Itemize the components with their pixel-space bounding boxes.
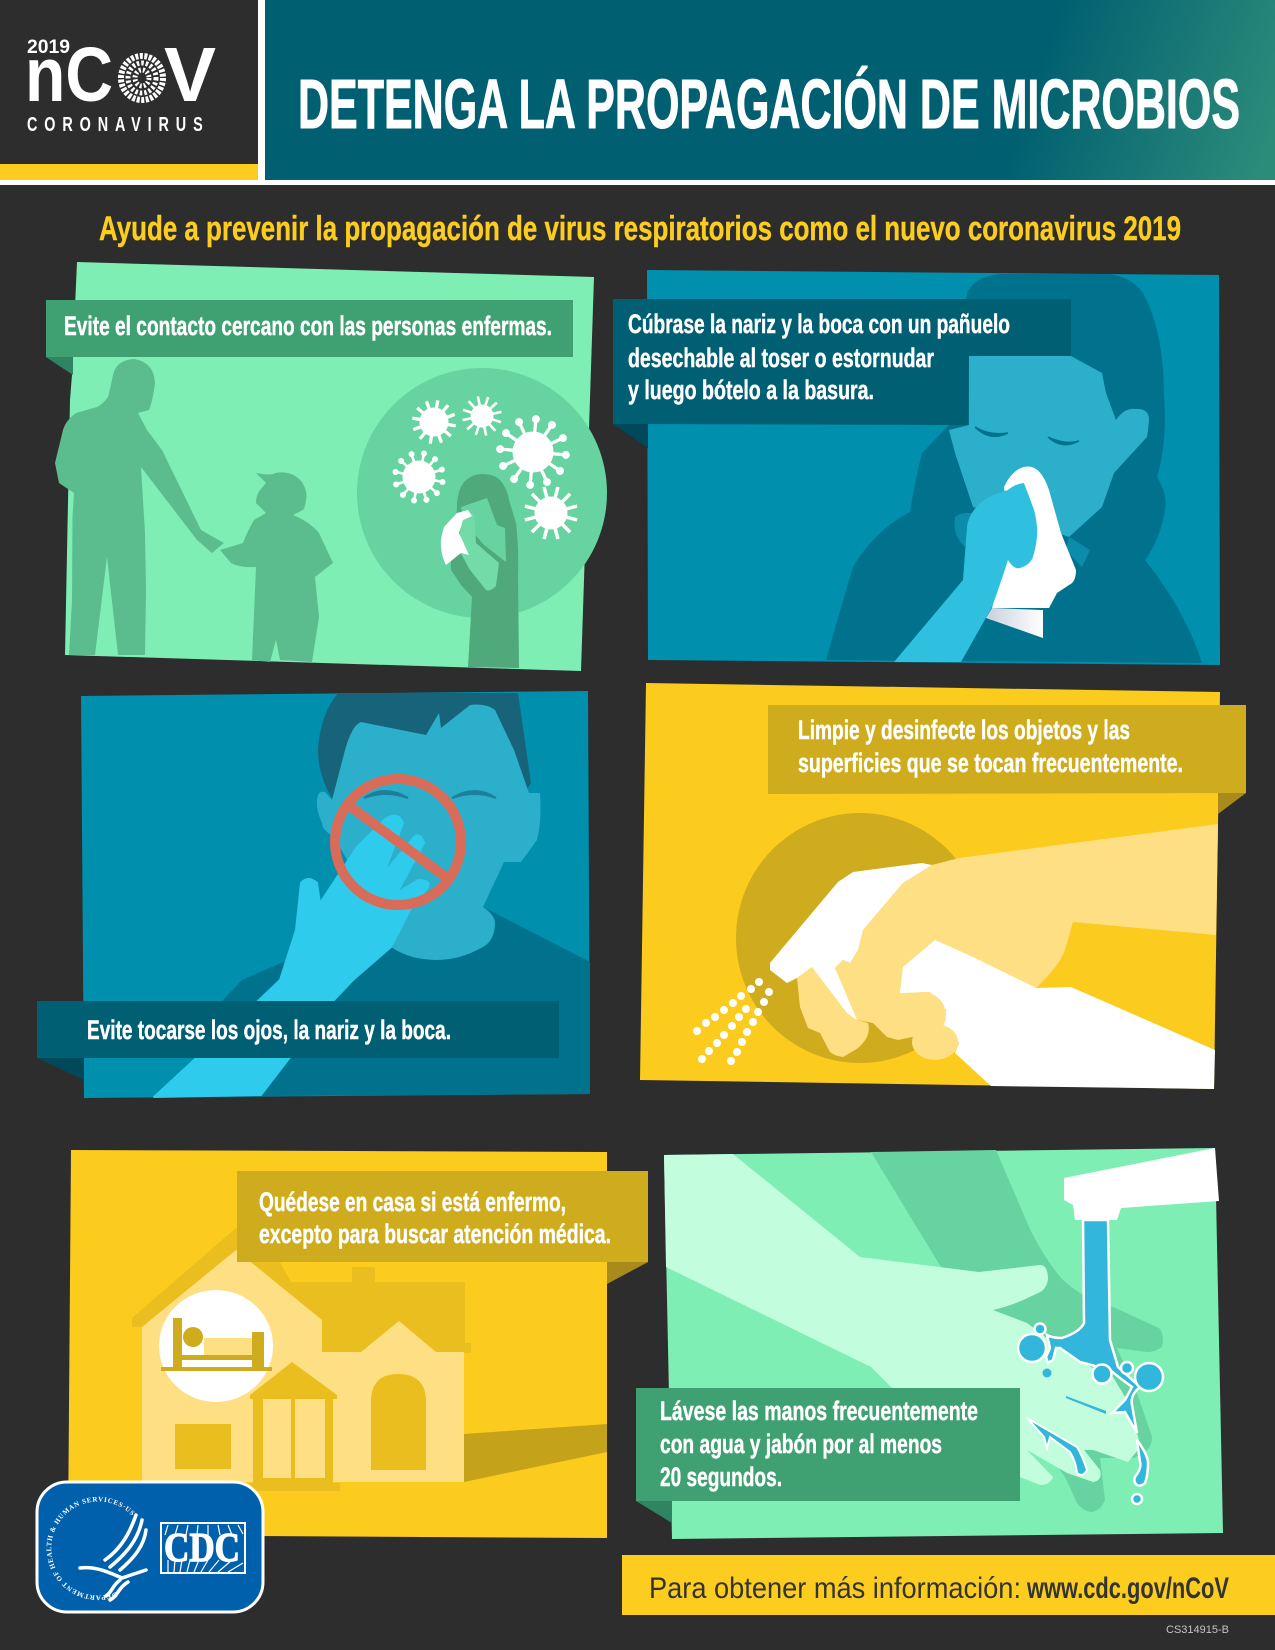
spray head bbox=[770, 863, 932, 1020]
prohibition sign bbox=[335, 779, 461, 905]
illustration: boy touching face bbox=[154, 693, 590, 1097]
banner: clean and disinfect bbox=[768, 705, 1246, 814]
banner: avoid close contact: Evite el contacto cercano con las personas enfermas. bbox=[64, 311, 552, 341]
front hand bbox=[664, 1154, 1139, 1485]
banner: cover nose and mouth: y luego bótelo a la basura. bbox=[628, 375, 874, 405]
publication code: CS314915-B bbox=[1166, 1624, 1229, 1636]
logo: HHS and CDC bbox=[36, 1480, 264, 1614]
panel: wash hands bbox=[636, 1148, 1223, 1539]
panel: cover nose and mouth bbox=[613, 270, 1220, 665]
bed in white circle bbox=[159, 1290, 273, 1402]
bottle body bbox=[900, 940, 1215, 1089]
illustration: house with bed bbox=[132, 1228, 607, 1491]
logo block: 2019 nCoV coronavirus bbox=[0, 0, 258, 180]
footer: more information: Para obtener más información: bbox=[649, 1572, 1021, 1605]
panel: stay home bbox=[68, 1150, 648, 1538]
water and bubbles bbox=[1018, 1220, 1163, 1504]
back hand bbox=[871, 1150, 1163, 1512]
banner: clean and disinfect: Limpie y desinfecte los objetos y las bbox=[798, 715, 1130, 745]
banner: stay home: excepto para buscar atención médica. bbox=[259, 1219, 611, 1249]
index finger bbox=[797, 967, 869, 1057]
panel: do not touch face bbox=[37, 691, 590, 1098]
footer: more information bbox=[622, 1555, 1275, 1615]
arm and palm bbox=[835, 824, 1218, 1040]
silhouette: mother bbox=[55, 359, 224, 655]
banner: stay home bbox=[237, 1171, 648, 1284]
panel: avoid close contact bbox=[46, 262, 607, 671]
banner: wash hands: Lávese las manos frecuentemente bbox=[660, 1396, 978, 1426]
banner: wash hands bbox=[636, 1388, 1020, 1523]
CDC mark: CDC bbox=[164, 1524, 240, 1570]
viruses bbox=[391, 391, 584, 546]
porch bbox=[250, 1362, 340, 1491]
illustration: woman with tissue bbox=[826, 274, 1202, 663]
banner: wash hands: con agua y jabón por al menos bbox=[660, 1429, 942, 1459]
logo block: 2019 nCoV coronavirus: V bbox=[164, 32, 216, 118]
illustration: hand with spray bottle bbox=[693, 813, 1218, 1089]
logo block: 2019 nCoV coronavirus: nC bbox=[25, 32, 113, 118]
faucet bbox=[1064, 1148, 1219, 1220]
header band bbox=[0, 0, 1275, 185]
banner: cover nose and mouth: Cúbrase la nariz y la boca con un pañuelo bbox=[628, 309, 1010, 339]
silhouette: boy bbox=[220, 472, 333, 662]
banner: cover nose and mouth: desechable al toser o estornudar bbox=[628, 343, 934, 373]
banner: avoid close contact bbox=[46, 300, 573, 375]
illustration: circle with sick person and viruses bbox=[357, 368, 607, 668]
spray dots bbox=[693, 978, 773, 1065]
sick girl bbox=[441, 474, 519, 668]
title bar bbox=[265, 0, 1275, 180]
HHS seal bbox=[46, 1496, 148, 1602]
panel: clean and disinfect bbox=[640, 683, 1246, 1089]
illustration: hands under faucet bbox=[664, 1148, 1219, 1512]
banner: do not touch face bbox=[37, 1001, 559, 1080]
logo block: 2019 nCoV coronavirus: 2019 bbox=[27, 37, 70, 58]
HHS seal: DEPARTMENT OF HEALTH & HUMAN SERVICES·USA bbox=[46, 1496, 135, 1600]
banner: cover nose and mouth bbox=[613, 299, 1071, 448]
banner: do not touch face: Evite tocarse los ojos, la nariz y la boca. bbox=[87, 1015, 451, 1045]
banner: wash hands: 20 segundos. bbox=[660, 1462, 782, 1492]
banner: stay home: Quédese en casa si está enfermo, bbox=[259, 1187, 566, 1217]
logo block: 2019 nCoV coronavirus: CORONAVIRUS bbox=[27, 113, 203, 136]
